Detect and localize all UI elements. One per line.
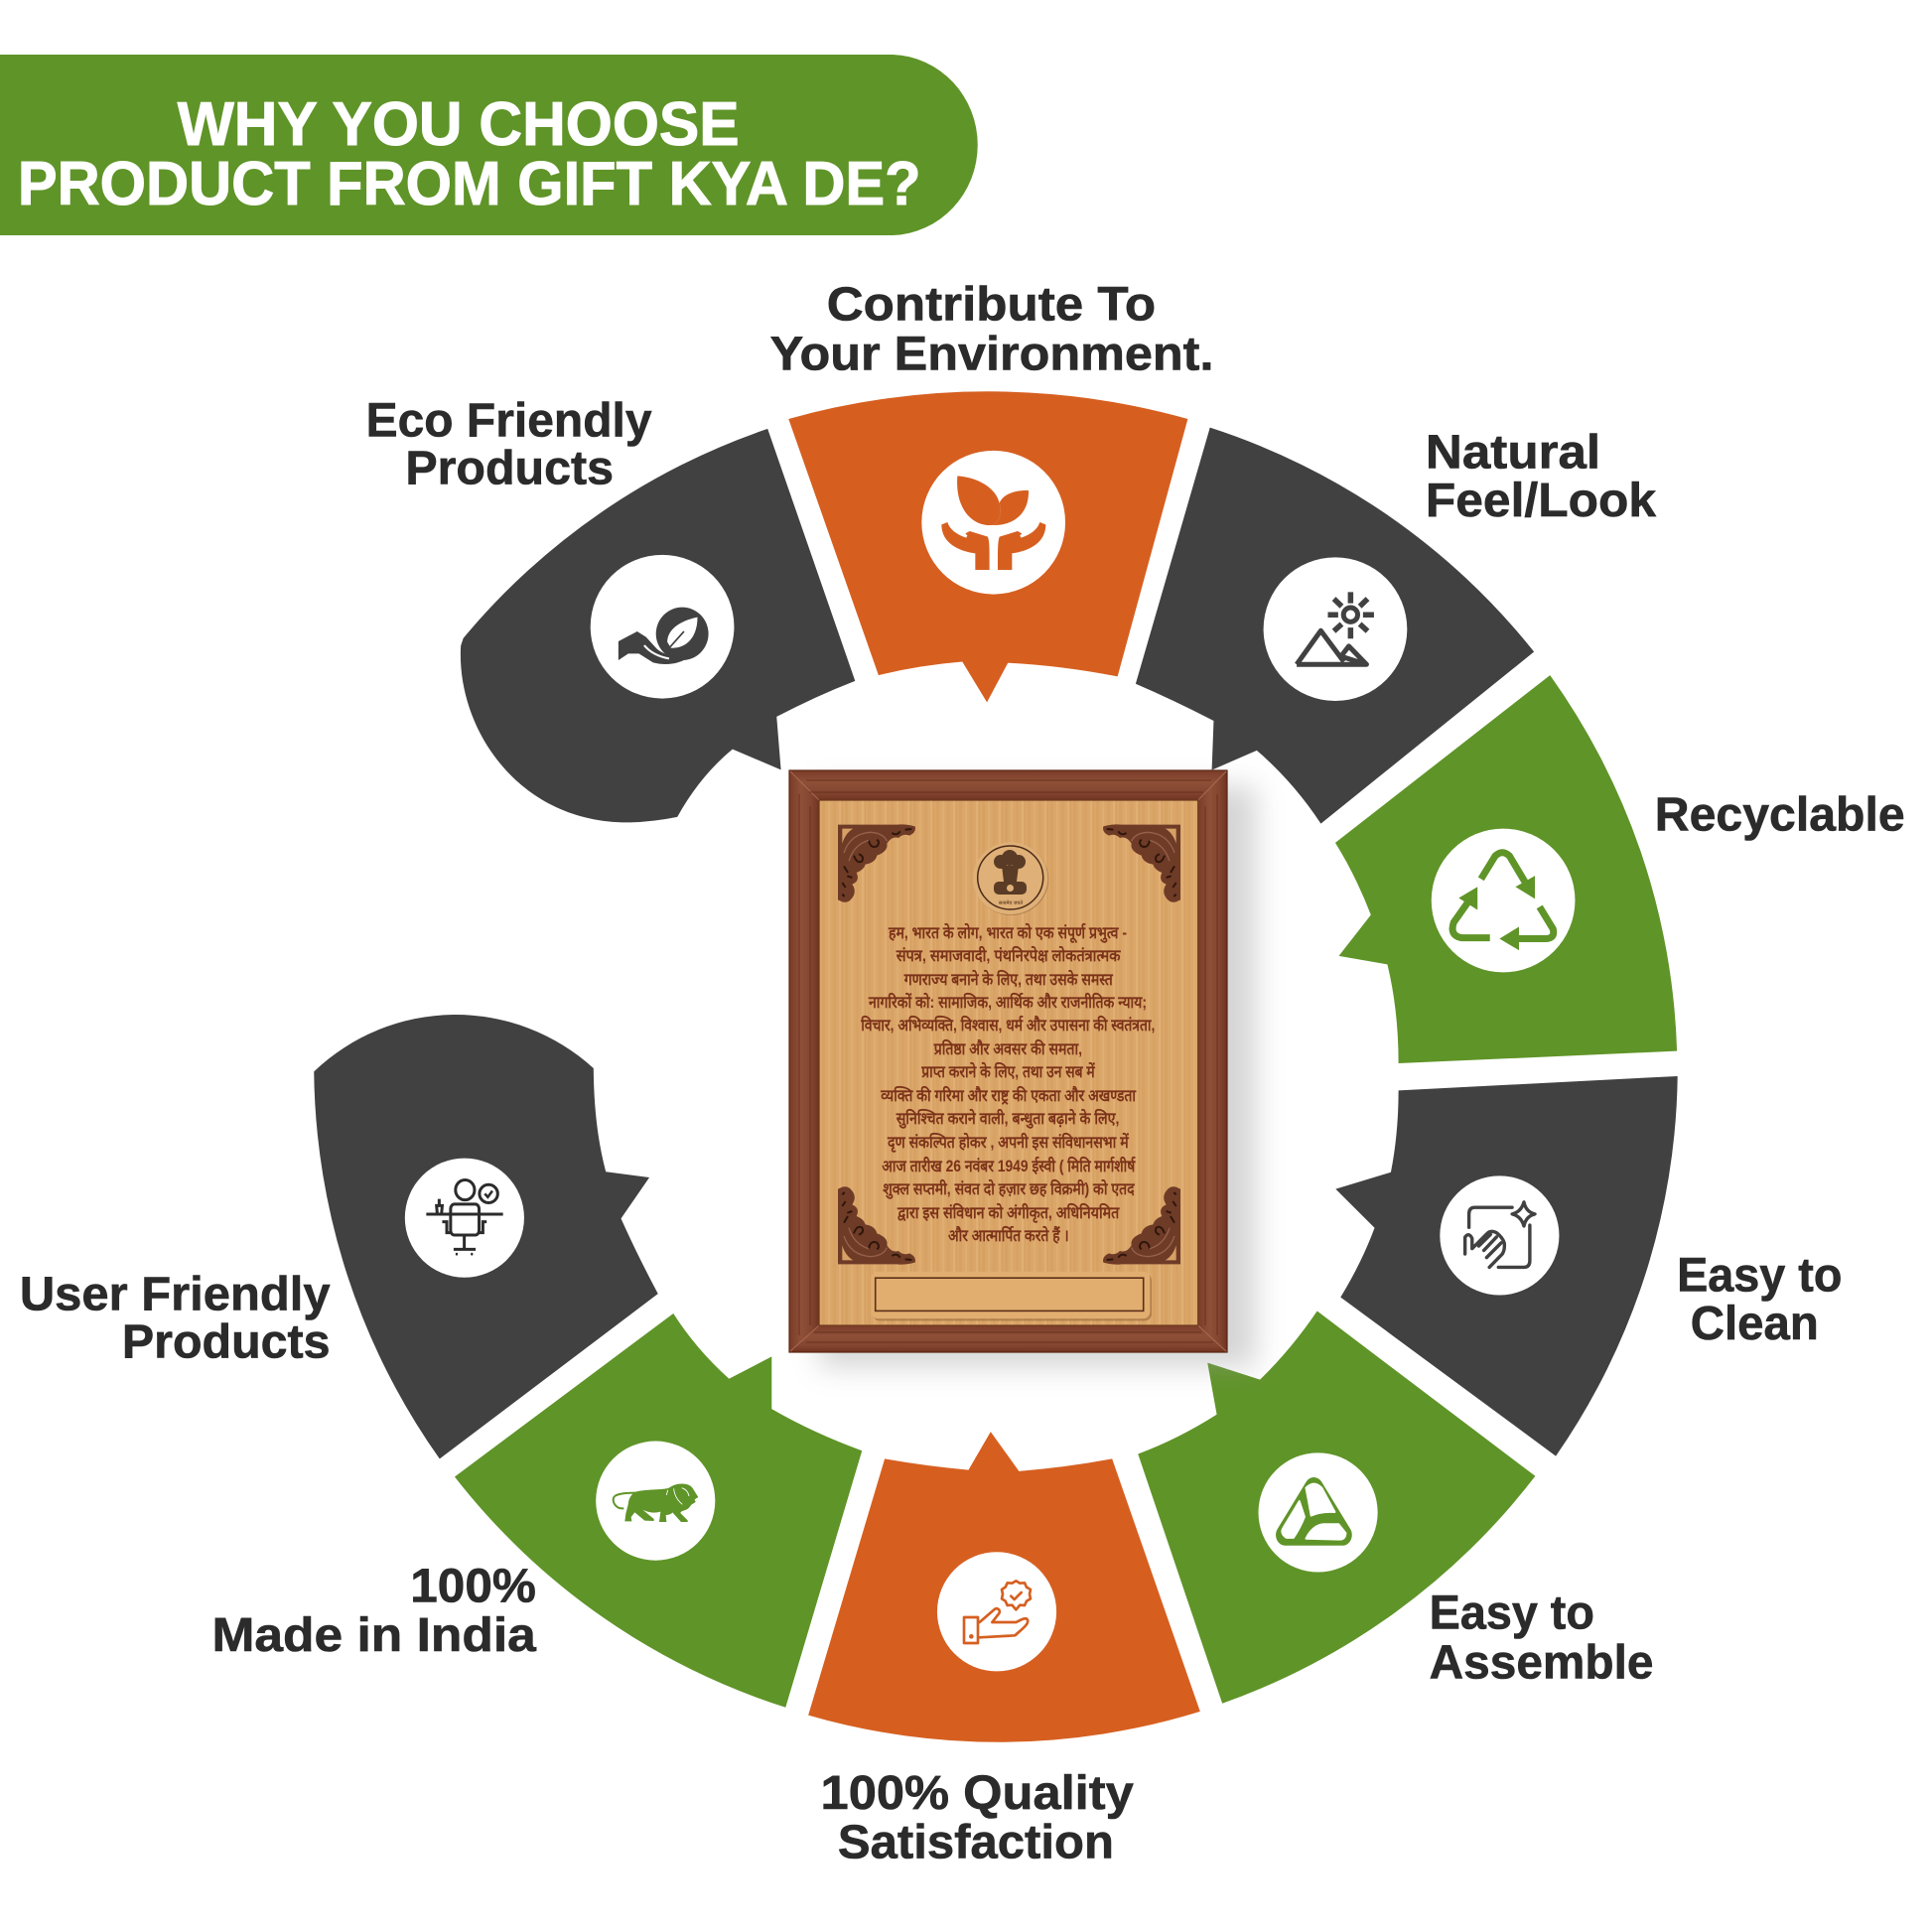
engraved preamble text: शुक्ल सप्तमी, संवत दो हज़ार छह विक्रमी) को एतद (883, 1178, 1136, 1199)
engraved preamble text: प्राप्त कराने के लिए, तथा उन सब में (920, 1061, 1096, 1081)
icon: hand holding leaf (619, 608, 709, 664)
frame (789, 770, 1227, 1352)
icon: user at desk (426, 1180, 503, 1256)
title: PRODUCT FROM GIFT KYA DE? (18, 150, 921, 218)
state emblem seal (973, 842, 1048, 915)
engraved preamble text: गणराज्य बनाने के लिए, तथा उसके समस्त (903, 969, 1113, 989)
label: 100% quality satisfaction (821, 1766, 1134, 1869)
engraved preamble text: और आत्मार्पित करते हैं । (948, 1225, 1069, 1245)
engraved preamble text: द्वारा इस संविधान को अंगीकृत, अधिनियमित (897, 1202, 1120, 1223)
icon: sun and mountains (1297, 592, 1374, 664)
bamboo panel (819, 800, 1198, 1325)
label: contribute to your environment (770, 278, 1213, 380)
label: eco friendly products (366, 393, 652, 495)
engraved preamble text: नागरिकों को: सामाजिक, आर्थिक और राजनीतिक न्याय; (868, 992, 1147, 1012)
label: 100% made in india (211, 1559, 537, 1662)
panel: eco friendly products (461, 429, 855, 822)
label: user friendly products (20, 1267, 331, 1369)
label: easy to assemble: Assemble (1430, 1635, 1654, 1689)
label: easy to clean: Easy to (1677, 1249, 1842, 1303)
state emblem seal: सत्यमेव जयते (999, 899, 1023, 906)
label: user friendly products: Products (122, 1315, 331, 1369)
label: 100% quality satisfaction: 100% Quality (821, 1766, 1134, 1820)
icon: three-part rounded triangle (1282, 1484, 1345, 1540)
engraved preamble text: दृण संकल्पित होकर , अपनी इस संविधानसभा में (887, 1132, 1130, 1153)
panel: recyclable (1335, 675, 1677, 1063)
icon: lion (614, 1484, 698, 1522)
engraved preamble text: आज तारीख 26 नवंबर 1949 ईस्वी ( मिति मार्गशीर्ष (882, 1156, 1137, 1175)
name plate (871, 1272, 1152, 1320)
label: 100% quality satisfaction: Satisfaction (838, 1816, 1114, 1869)
label: 100% made in india: Made in India (211, 1608, 537, 1662)
label: easy to assemble: Easy to (1430, 1587, 1594, 1640)
label: easy to clean (1677, 1249, 1842, 1350)
label: contribute to your environment: Your Environment. (770, 327, 1213, 380)
label: natural feel/look: Feel/Look (1426, 474, 1656, 527)
panel: made in india (455, 1313, 862, 1708)
engraved preamble text: विचार, अभिव्यक्ति, विश्वास, धर्म और उपासना की स्वतंत्रता, (860, 1015, 1155, 1035)
label: easy to assemble (1430, 1587, 1654, 1689)
label: easy to clean: Clean (1691, 1297, 1819, 1350)
panel: natural feel/look (1136, 428, 1534, 824)
engraved preamble text: संपत्र, समाजवादी, पंथनिरपेक्ष लोकतंत्रात्मक (896, 945, 1122, 965)
engraved preamble text: व्यक्ति की गरिमा और राष्ट्र की एकता और अखण्डता (880, 1085, 1137, 1105)
icon: recycle arrows (1452, 853, 1554, 950)
engraved preamble text: सुनिश्चित कराने वाली, बन्धुता बढ़ाने के लिए, (896, 1108, 1119, 1129)
corner ornaments (838, 824, 1180, 1265)
header banner (0, 55, 978, 235)
label: natural feel/look (1426, 426, 1656, 527)
engraved preamble text (860, 922, 1155, 1245)
icon: hands holding plant (941, 476, 1045, 570)
label: eco friendly products: Products (405, 442, 614, 495)
panel: easy to clean (1335, 1076, 1678, 1456)
engraved preamble text: हम, भारत के लोग, भारत को एक संपूर्ण प्रभुत्व - (888, 922, 1127, 943)
label: eco friendly products: Eco Friendly (366, 393, 652, 447)
icon: hand with quality badge (964, 1581, 1031, 1643)
label: contribute to your environment: Contribute To (827, 278, 1156, 332)
title (18, 90, 921, 218)
panel: contribute to your environment (788, 391, 1187, 702)
icon: cleaning hand with sparkle (1465, 1202, 1535, 1267)
label: user friendly products: User Friendly (20, 1267, 331, 1320)
wooden plaque product photo (789, 770, 1256, 1367)
label: natural feel/look: Natural (1426, 426, 1600, 480)
panel: easy to assemble (1138, 1311, 1535, 1704)
label: 100% made in india: 100% (410, 1559, 536, 1612)
panel: 100% quality satisfaction (808, 1432, 1200, 1742)
label: recyclable: Recyclable (1655, 787, 1905, 841)
panel: user friendly products (314, 1015, 658, 1458)
title: WHY YOU CHOOSE (178, 90, 740, 159)
engraved preamble text: प्रतिष्ठा और अवसर की समता, (933, 1038, 1082, 1058)
